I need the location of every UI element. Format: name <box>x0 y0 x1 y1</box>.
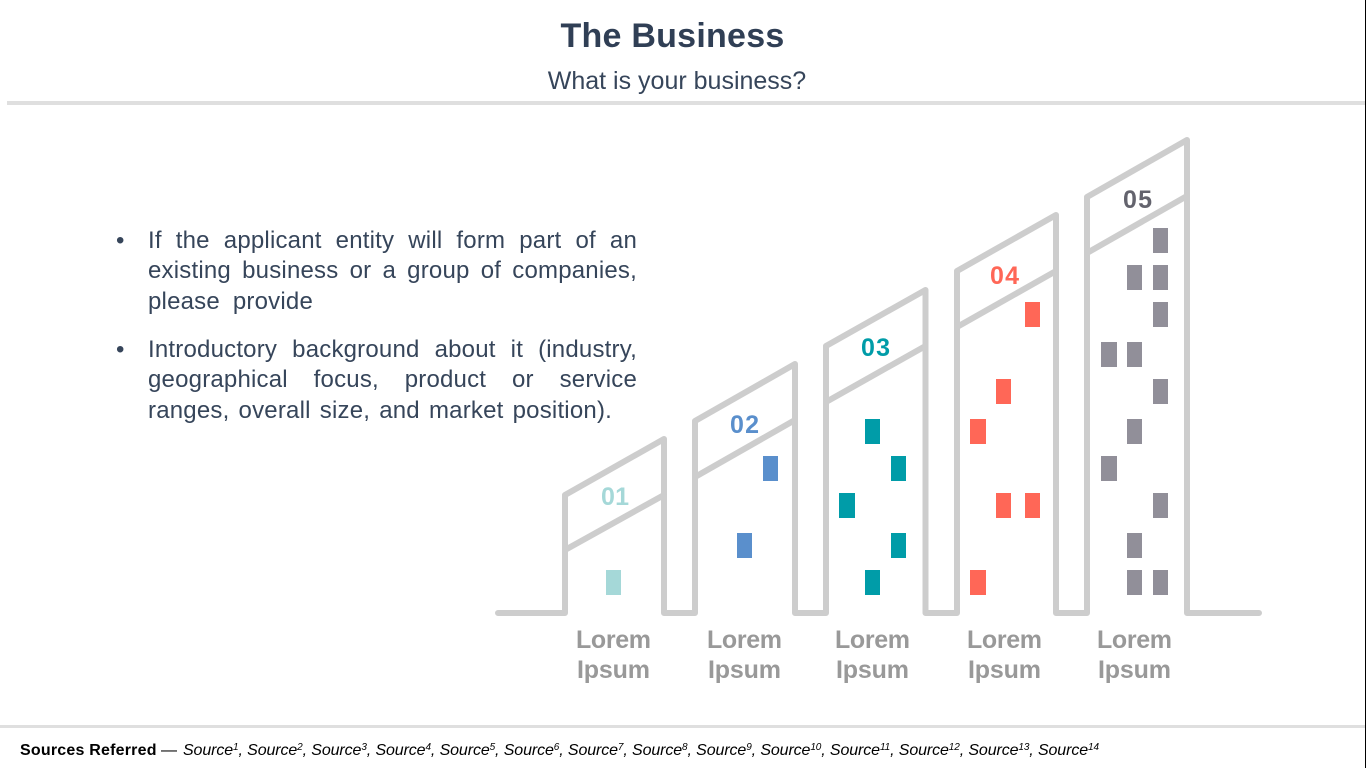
subtitle: What is your business? <box>548 67 806 95</box>
bullet point two: geographical focus, product or service <box>148 366 637 393</box>
building 03: 03 <box>861 334 890 362</box>
building 03: Lorem <box>835 626 910 654</box>
building 05: Lorem <box>1097 626 1172 654</box>
sources footnote: 12 <box>949 742 960 753</box>
sources footnote: , Source <box>431 742 490 759</box>
bullet point two: Introductory background about it (industry, <box>148 336 637 363</box>
sources footnote: Source <box>183 742 233 759</box>
sources footnote: 1 <box>233 742 239 753</box>
sources footnote: 6 <box>554 742 560 753</box>
sources footnote: — <box>161 742 177 759</box>
bullet point two: ranges, overall size, and market position). <box>148 397 612 424</box>
building 01 <box>576 483 651 684</box>
building 05 <box>1097 186 1172 684</box>
sources footnote: 3 <box>361 742 367 753</box>
right edge line <box>1365 0 1366 768</box>
sources footnote: 7 <box>618 742 624 753</box>
sources footnote: 13 <box>1018 742 1030 753</box>
sources footnote <box>20 742 1099 759</box>
building 01: Ipsum <box>577 656 650 684</box>
building 02 <box>707 411 782 684</box>
sources footnote: 10 <box>810 742 822 753</box>
bullet point two: • <box>116 336 124 363</box>
building 01: 01 <box>601 483 629 511</box>
building 05: Ipsum <box>1098 656 1171 684</box>
sources footnote: , Source <box>303 742 362 759</box>
building 04: Lorem <box>967 626 1042 654</box>
building 04: 04 <box>990 262 1019 290</box>
building 03: Ipsum <box>836 656 909 684</box>
sources footnote: , Source <box>238 742 297 759</box>
sources footnote: , Source <box>821 742 880 759</box>
skyline outline <box>498 140 1259 613</box>
sources footnote: , Source <box>890 742 949 759</box>
sources footnote: 5 <box>490 742 496 753</box>
sources footnote: , Source <box>752 742 811 759</box>
header rule <box>7 101 1365 105</box>
sources footnote: , Source <box>495 742 554 759</box>
sources footnote: 14 <box>1088 742 1099 753</box>
building 01: Lorem <box>576 626 651 654</box>
sources footnote: , Source <box>1029 742 1088 759</box>
sources footnote: , Source <box>623 742 682 759</box>
bullet point one: please provide <box>148 288 313 315</box>
sources footnote: , Source <box>559 742 618 759</box>
building 02: Ipsum <box>708 656 781 684</box>
building 05: 05 <box>1123 186 1152 214</box>
sources footnote: , Source <box>367 742 426 759</box>
sources footnote: 9 <box>746 742 752 753</box>
bullet point one: • <box>116 227 124 254</box>
sources footnote: 4 <box>425 742 431 753</box>
bullet point one: existing business or a group of companies, <box>148 257 637 284</box>
bullet point one <box>116 227 637 315</box>
sources footnote: Sources Referred <box>20 742 156 759</box>
sources footnote: 11 <box>880 742 890 753</box>
bullet point one: If the applicant entity will form part of an <box>148 227 637 254</box>
building 02: 02 <box>730 411 759 439</box>
building 02: Lorem <box>707 626 782 654</box>
building 04: Ipsum <box>968 656 1041 684</box>
building 04 <box>967 262 1042 684</box>
sources footnote: , Source <box>960 742 1019 759</box>
building 03 <box>835 334 910 684</box>
footer rule <box>0 725 1365 728</box>
sources footnote: 2 <box>296 742 303 753</box>
sources footnote: , Source <box>688 742 746 759</box>
sources footnote: 8 <box>682 742 688 753</box>
bullet text block <box>116 227 637 424</box>
bullet point two <box>116 336 637 424</box>
title: The Business <box>560 17 785 55</box>
